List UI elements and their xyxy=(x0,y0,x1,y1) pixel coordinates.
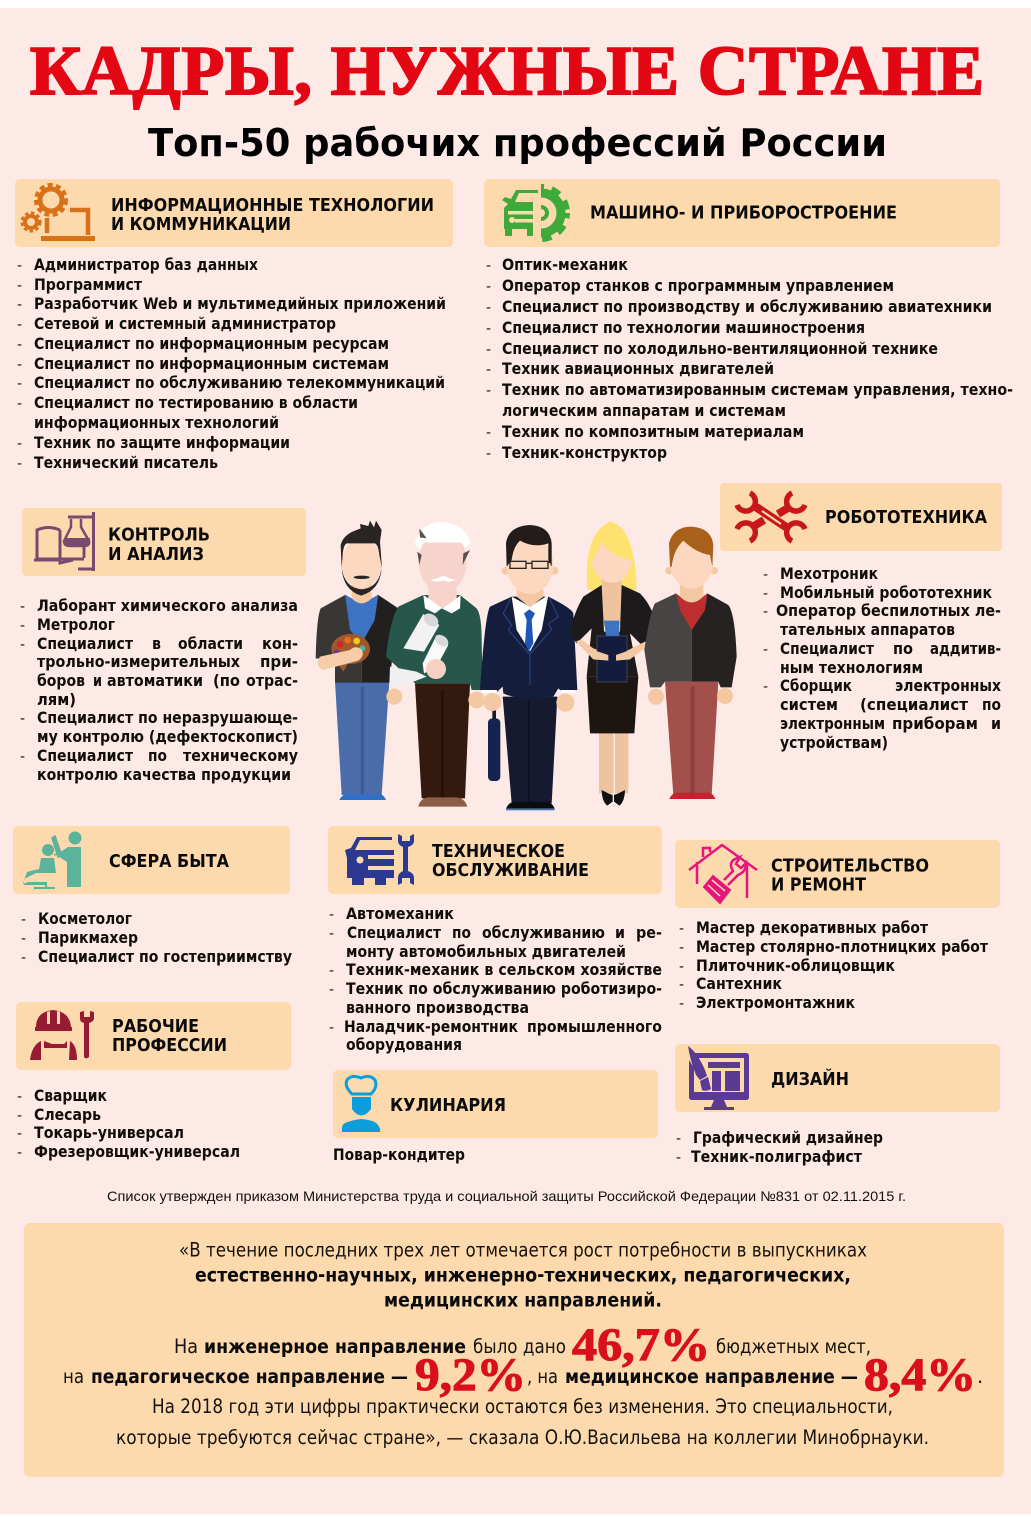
list: и xyxy=(615,923,625,942)
list: - xyxy=(486,342,491,358)
list: Специалист xyxy=(347,923,442,942)
list: - xyxy=(17,357,22,373)
list: Техник по композитным материалам xyxy=(502,422,804,441)
list: - xyxy=(21,912,26,928)
list: Технический писатель xyxy=(34,453,218,472)
list: Разработчик Web и мультимедийных приложений xyxy=(34,294,446,313)
list xyxy=(17,255,446,472)
heading: РАБОЧИЕ xyxy=(112,1017,199,1037)
heading: И РЕМОНТ xyxy=(771,876,866,896)
panel: services xyxy=(13,826,293,966)
subtitle: Топ-50 рабочих профессий России xyxy=(148,121,887,165)
title: КАДРЫ, НУЖНЫЕ СТРАНЕ xyxy=(30,33,984,110)
heading: КОНТРОЛЬ xyxy=(108,526,210,546)
heading xyxy=(112,1017,227,1056)
list: - xyxy=(21,950,26,966)
list: - xyxy=(17,1145,22,1161)
quote text: budget shares: на xyxy=(63,1365,84,1388)
list: - xyxy=(20,749,25,765)
list: - xyxy=(17,278,22,294)
list: Лаборант химического анализа xyxy=(37,596,298,615)
list: Автомеханик xyxy=(346,904,454,923)
list: - xyxy=(679,996,684,1012)
quote text: closing: На 2018 год эти цифры практически остаются без изменения. Это специальности, xyxy=(152,1395,893,1418)
list: и xyxy=(991,714,1001,733)
list: Графический дизайнер xyxy=(693,1128,883,1147)
list: Специалист по неразрушающе- xyxy=(37,708,298,727)
list: устройствам) xyxy=(780,733,888,752)
list: лям) xyxy=(37,690,76,709)
list: Специалист по информационным ресурсам xyxy=(34,334,389,353)
heading: СФЕРА БЫТА xyxy=(109,852,229,872)
list: по xyxy=(893,639,913,658)
list: Фрезеровщик-универсал xyxy=(34,1142,240,1161)
quote text: closing: которые требуются сейчас стране», — сказала О.Ю.Васильева на коллегии Минобрнауки. xyxy=(116,1426,929,1449)
list: Наладчик-ремонтник xyxy=(344,1017,518,1036)
quote text: budget shares: педагогическое направление — xyxy=(91,1365,408,1388)
list xyxy=(21,909,293,966)
icon: helmet and wrench xyxy=(30,1010,94,1060)
quote text: budget shares xyxy=(63,1319,983,1401)
list: - xyxy=(17,456,22,472)
list: Техник по обслуживанию роботизиро- xyxy=(346,979,662,998)
list: при- xyxy=(260,652,298,671)
list: по xyxy=(982,695,1001,714)
quote text: top paragraph: естественно-научных, инженерно-технических, педагогических, xyxy=(195,1264,851,1286)
list: - xyxy=(676,1131,681,1147)
header bar xyxy=(13,826,290,894)
list: - xyxy=(20,637,25,653)
quote text: budget shares: 46,7% xyxy=(572,1319,710,1371)
list: области xyxy=(178,634,243,653)
list: Специалист xyxy=(780,639,875,658)
figure: engineer xyxy=(386,522,485,807)
list: Администратор баз данных xyxy=(34,255,259,274)
list: - xyxy=(763,586,768,602)
list: ванного производства xyxy=(346,998,529,1017)
list: Повар-кондитер xyxy=(333,1145,465,1164)
icon: gears and laptop xyxy=(22,185,95,241)
list: Парикмахер xyxy=(38,928,138,947)
list: - xyxy=(329,926,334,942)
heading: ПРОФЕССИИ xyxy=(112,1036,227,1056)
quote text: budget shares: На xyxy=(174,1335,198,1358)
figure: businesswoman xyxy=(570,522,659,806)
list: Специалист по холодильно-вентиляционной технике xyxy=(502,339,938,358)
header bar xyxy=(16,1002,291,1070)
list: - xyxy=(486,279,491,295)
list xyxy=(20,596,299,784)
list: Мастер декоративных работ xyxy=(696,918,929,937)
list: приборам xyxy=(892,714,978,733)
heading: СТРОИТЕЛЬСТВО xyxy=(771,856,929,876)
list: му контролю (дефектоскопист) xyxy=(37,727,298,746)
heading: И АНАЛИЗ xyxy=(108,545,204,565)
list: - xyxy=(329,982,334,998)
list: Специалист xyxy=(37,634,134,653)
list: кон- xyxy=(262,634,298,653)
list: Техник по защите информации xyxy=(34,433,290,452)
quote text: budget shares: медицинское направление — xyxy=(565,1365,858,1388)
list: Сварщик xyxy=(34,1086,107,1105)
list: ре- xyxy=(636,923,662,942)
list: - xyxy=(763,642,768,658)
list: информационных технологий xyxy=(34,413,279,432)
quote text: closing xyxy=(116,1395,929,1449)
list: Мобильный робототехник xyxy=(780,583,992,602)
list: Сантехник xyxy=(696,974,782,993)
panel: quote xyxy=(24,1223,1004,1477)
list: Мастер столярно-плотницких работ xyxy=(696,937,989,956)
quote text: budget shares: бюджетных мест, xyxy=(716,1335,871,1358)
list: - xyxy=(486,362,491,378)
list: Специалист xyxy=(37,746,134,765)
list: - xyxy=(486,321,491,337)
list: Оптик-механик xyxy=(502,255,628,274)
list: оборудования xyxy=(346,1035,462,1054)
list: Техник-механик в сельском хозяйстве xyxy=(346,960,662,979)
list: Техник-конструктор xyxy=(502,443,667,462)
list xyxy=(679,918,989,1012)
panel: robotics xyxy=(720,483,1002,752)
heading xyxy=(111,196,434,235)
list: боров xyxy=(37,671,85,690)
list: - xyxy=(676,1150,681,1166)
list xyxy=(763,564,1002,752)
heading: ДИЗАЙН xyxy=(771,1068,849,1090)
list: - xyxy=(17,297,22,313)
panel: control and analysis xyxy=(20,508,306,784)
list: монту автомобильных двигателей xyxy=(346,942,626,961)
list: (по xyxy=(213,671,240,690)
list: - xyxy=(329,907,334,923)
list: - xyxy=(679,921,684,937)
list: контролю качества продукции xyxy=(37,765,291,784)
list xyxy=(486,255,1013,462)
quote text: budget shares: 9,2% xyxy=(415,1349,526,1401)
heading xyxy=(108,526,210,565)
header bar xyxy=(15,179,453,247)
list: Слесарь xyxy=(34,1105,101,1124)
list: в xyxy=(152,634,161,653)
quote text: budget shares: инженерное направление xyxy=(204,1335,466,1358)
list: тательных аппаратов xyxy=(780,620,955,639)
icon: car and half gear xyxy=(502,188,566,238)
header bar xyxy=(22,508,306,576)
list: Оператор станков с программным управлением xyxy=(502,276,894,295)
heading: ТЕХНИЧЕСКОЕ xyxy=(432,842,565,862)
header bar xyxy=(720,483,1002,551)
list: по xyxy=(148,746,167,765)
list: - xyxy=(329,963,334,979)
list: - xyxy=(20,711,25,727)
list: Специалист по информационным системам xyxy=(34,354,389,373)
list: Техник авиационных двигателей xyxy=(502,359,774,378)
list: Сборщик xyxy=(780,676,852,695)
list: - xyxy=(17,1126,22,1142)
list: - xyxy=(486,258,491,274)
list: - xyxy=(17,258,22,274)
list: Косметолог xyxy=(38,909,132,928)
header bar xyxy=(328,826,662,894)
list: - xyxy=(20,618,25,634)
list: Сетевой и системный администратор xyxy=(34,314,336,333)
list: электронных xyxy=(895,676,1002,695)
quote text: budget shares: было дано xyxy=(473,1335,566,1358)
header bar xyxy=(675,1044,1000,1112)
header bar xyxy=(484,179,1000,247)
list: техническому xyxy=(183,746,299,765)
list: Техник-полиграфист xyxy=(691,1147,863,1166)
list: Специалист по обслуживанию телекоммуникаций xyxy=(34,373,445,392)
list: - xyxy=(486,446,491,462)
icon: house and tools xyxy=(689,845,757,903)
quote text: top paragraph xyxy=(179,1238,867,1312)
heading: ИНФОРМАЦИОННЫЕ ТЕХНОЛОГИИ xyxy=(111,196,434,216)
icon: crossed wrenches xyxy=(737,493,805,541)
icon: monitor and brush xyxy=(688,1046,749,1110)
illustration: five workers xyxy=(316,521,737,810)
list: - xyxy=(486,300,491,316)
panel: workers xyxy=(16,1002,291,1161)
list: - xyxy=(17,1108,22,1124)
icon: book and flask xyxy=(34,512,94,571)
list: - xyxy=(20,599,25,615)
list: по xyxy=(452,923,471,942)
list: Специалист по тестированию в области xyxy=(34,393,358,412)
header bar xyxy=(333,1070,658,1138)
list: промышленного xyxy=(527,1017,662,1036)
list: систем xyxy=(780,695,838,714)
list: - xyxy=(17,317,22,333)
heading: ОБСЛУЖИВАНИЕ xyxy=(432,861,589,881)
quote text: budget shares: , на xyxy=(527,1365,558,1388)
list: - xyxy=(679,940,684,956)
list: (специалист xyxy=(860,695,969,714)
panel: information technology xyxy=(15,179,453,472)
figure: young man xyxy=(644,527,737,799)
list: - xyxy=(17,1089,22,1105)
list: - xyxy=(486,383,491,399)
heading: МАШИНО- И ПРИБОРОСТРОЕНИЕ xyxy=(590,204,897,224)
list: ным технологиям xyxy=(780,658,923,677)
heading: КУЛИНАРИЯ xyxy=(390,1096,506,1116)
list: и xyxy=(93,671,102,690)
icon: car and wrench xyxy=(345,834,414,885)
list: - xyxy=(763,679,768,695)
list: - xyxy=(17,376,22,392)
list: Программист xyxy=(34,275,143,294)
panel: maintenance xyxy=(328,826,662,1054)
figure: businessman xyxy=(480,525,577,810)
icon: hairdresser xyxy=(23,832,82,889)
list: - xyxy=(679,977,684,993)
list: Специалист по гостеприимству xyxy=(38,947,293,966)
list: Мехотроник xyxy=(780,564,878,583)
header bar xyxy=(675,840,1000,908)
heading xyxy=(432,842,589,881)
list: отрас- xyxy=(246,671,298,690)
panel: machine building xyxy=(484,179,1013,462)
figure: artist xyxy=(316,521,402,800)
quote text: budget shares: . xyxy=(977,1365,983,1388)
list: - xyxy=(17,337,22,353)
panel: design xyxy=(675,1044,1000,1166)
list: Токарь-универсал xyxy=(34,1123,184,1142)
list: обслуживанию xyxy=(482,923,605,942)
list: - xyxy=(329,1020,334,1036)
list: аддитив- xyxy=(930,639,1001,658)
list: логическим аппаратам и системам xyxy=(502,401,786,420)
panel: construction xyxy=(675,840,1000,1012)
list: - xyxy=(21,931,26,947)
quote text: top paragraph: «В течение последних трех лет отмечается рост потребности в выпускниках xyxy=(179,1238,867,1262)
icon: chef xyxy=(342,1076,380,1132)
list: - xyxy=(486,425,491,441)
list: - xyxy=(679,959,684,975)
source note: Список утвержден приказом Министерства труда и социальной защиты Российской Федерации №831 от 02.11.2015 г. xyxy=(107,1188,906,1204)
list: Электромонтажник xyxy=(696,993,855,1012)
list: Метролог xyxy=(37,615,115,634)
list xyxy=(676,1128,883,1166)
list: автоматики xyxy=(107,671,203,690)
list: - xyxy=(17,396,22,412)
list: - xyxy=(763,567,768,583)
list: трольно-измерительных xyxy=(37,652,241,671)
list: электронным xyxy=(780,714,885,733)
list xyxy=(17,1086,240,1161)
list: Оператор беспилотных ле- xyxy=(776,601,1001,620)
heading xyxy=(771,856,929,896)
list: - xyxy=(17,436,22,452)
heading: РОБОТОТЕХНИКА xyxy=(825,508,987,528)
panel: culinary xyxy=(333,1070,658,1164)
list xyxy=(329,904,662,1054)
quote text: top paragraph: медицинских направлений. xyxy=(384,1288,662,1312)
list: Специалист по технологии машиностроения xyxy=(502,318,865,337)
quote text: budget shares: 8,4% xyxy=(864,1349,976,1401)
heading: И КОММУНИКАЦИИ xyxy=(111,215,291,235)
list: Плиточник-облицовщик xyxy=(696,956,895,975)
quote background xyxy=(24,1223,1004,1477)
list: - xyxy=(763,604,768,620)
